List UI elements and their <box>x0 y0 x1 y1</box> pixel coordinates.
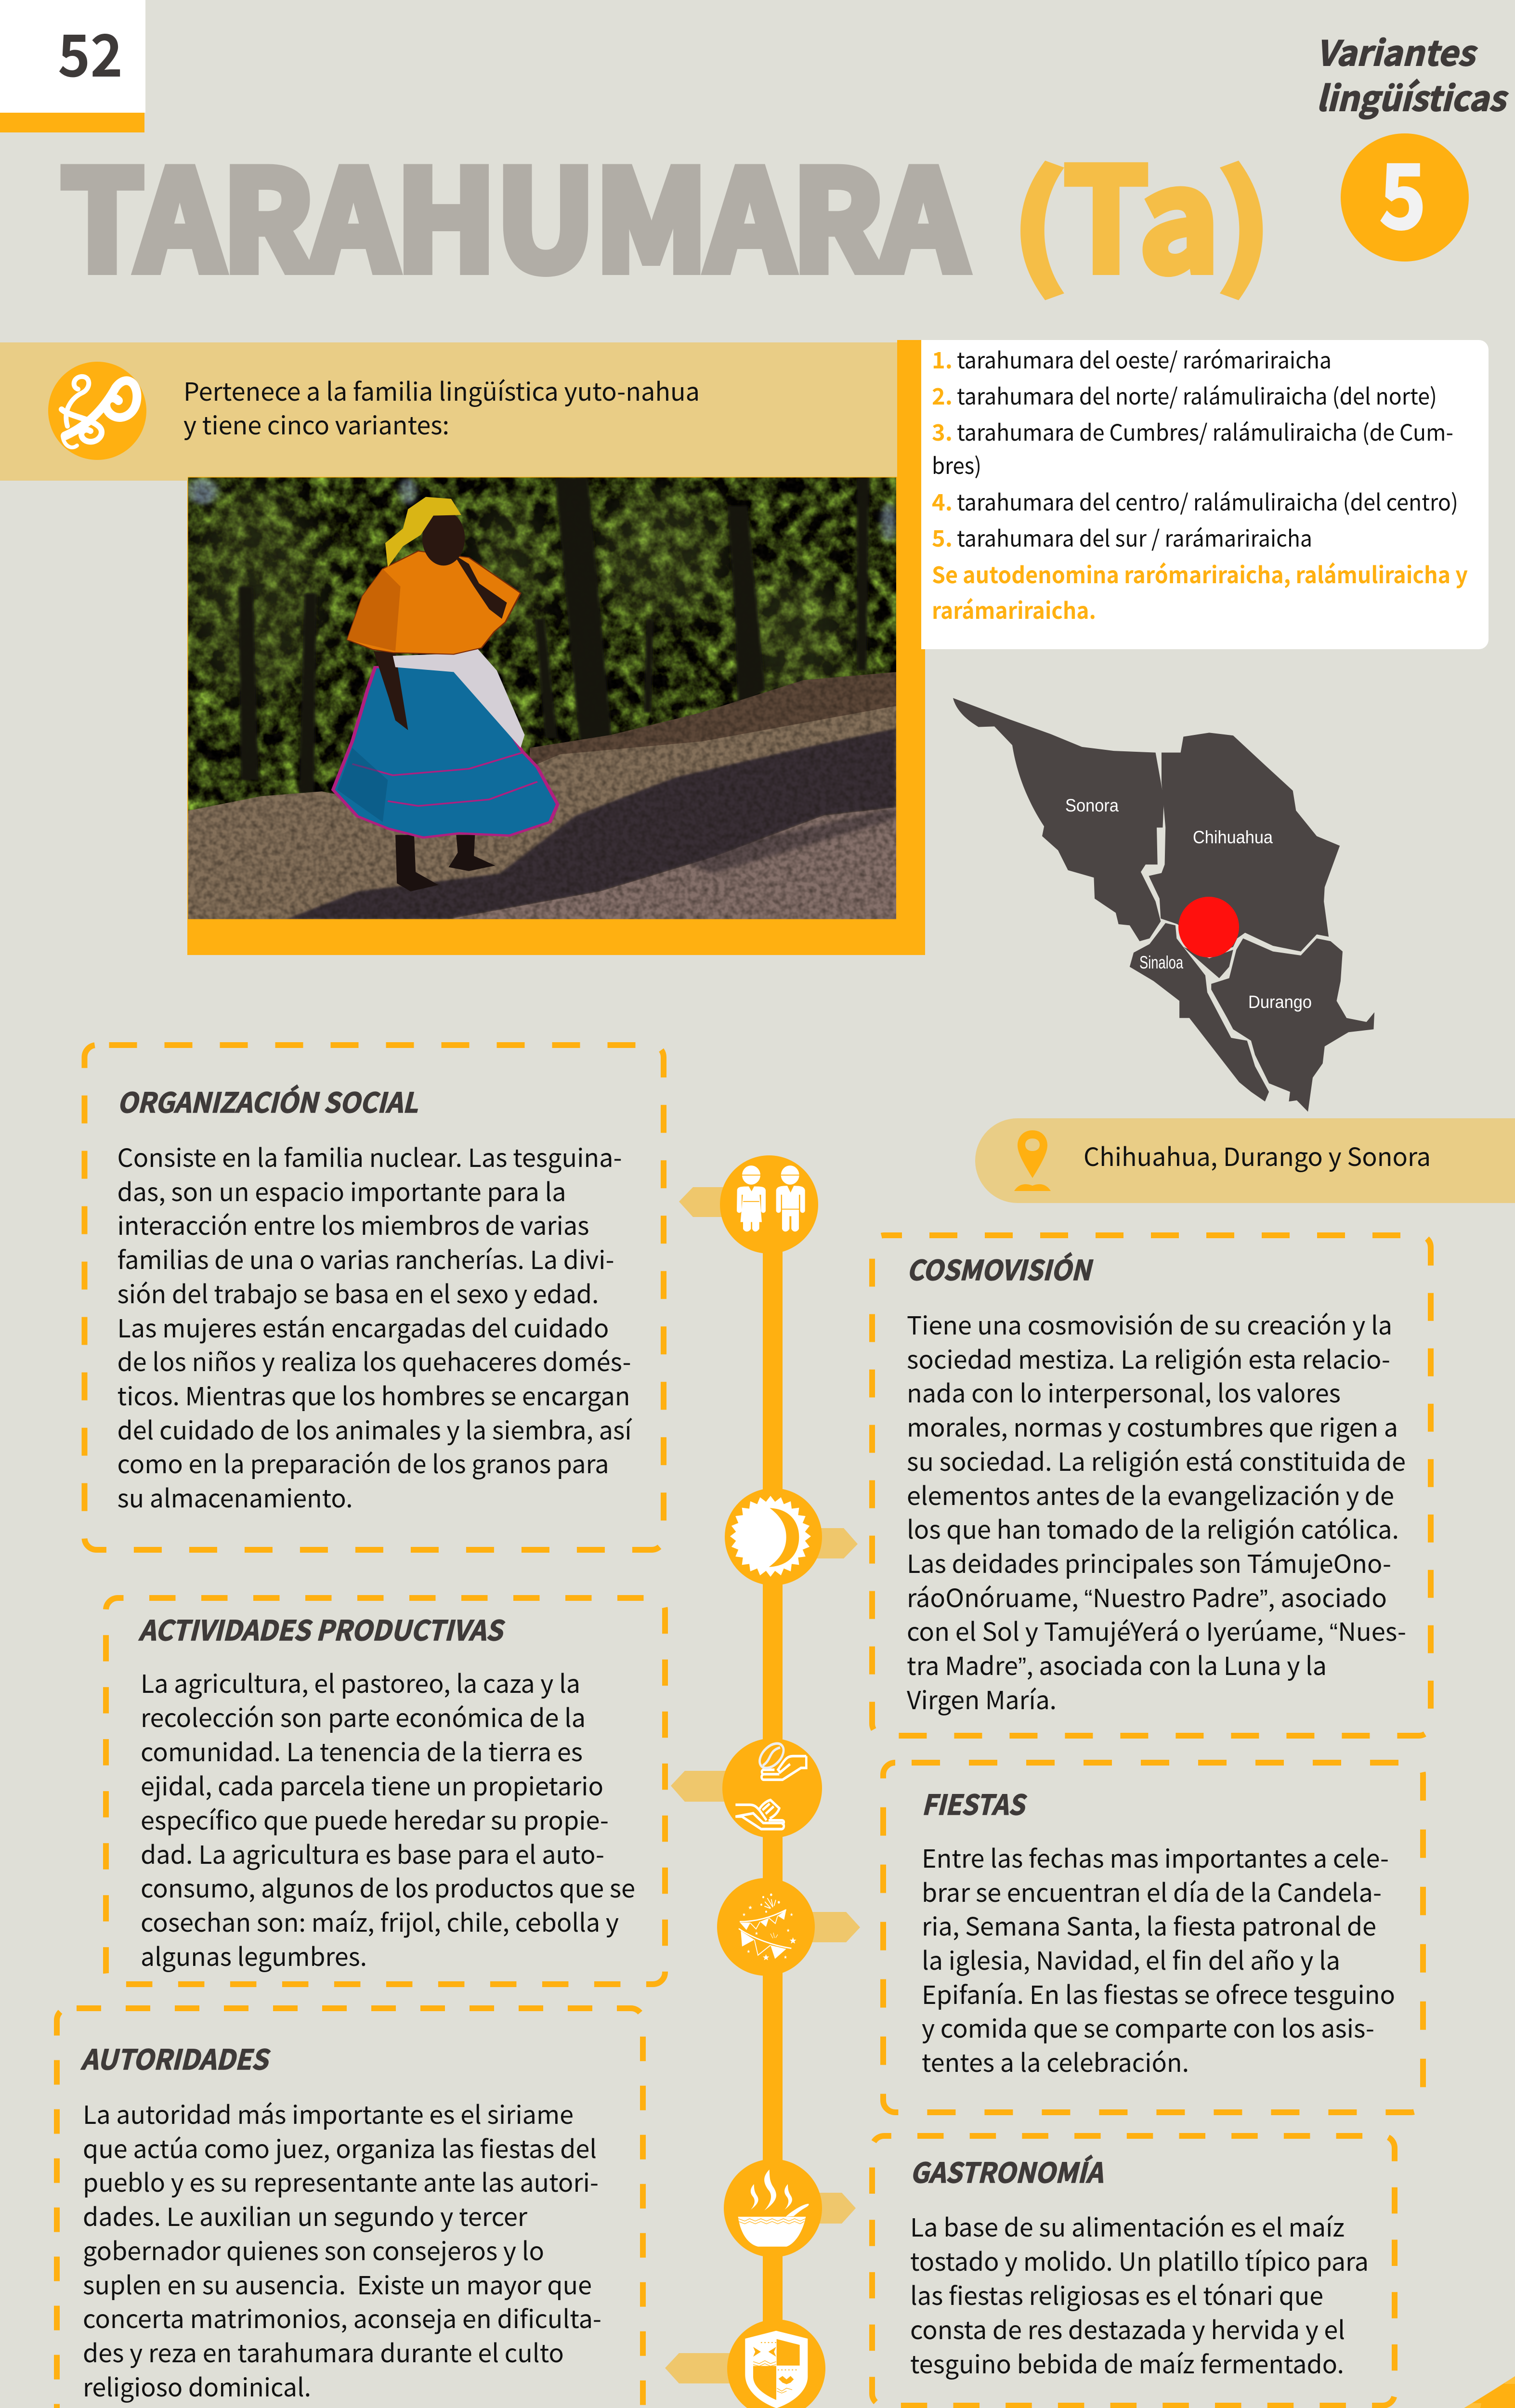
variants list panel: 1. <box>932 342 953 375</box>
state labels: Durango <box>1248 992 1312 1012</box>
text: cosmovisión: sociedad mestiza. La religión esta relacio- <box>907 1340 1390 1376</box>
title: TARAHUMARA <box>61 112 968 310</box>
text: cosmovisión: Tiene una cosmovisión de su creación y la <box>907 1306 1392 1342</box>
panel: cosmovisión <box>872 1235 1431 1736</box>
variants list panel: tarahumara del centro/ ralámuliraicha (del centro) <box>957 484 1458 517</box>
text: gastronomía: las fiestas religiosas es el tónari que <box>910 2276 1323 2312</box>
panel: organización social <box>85 1045 664 1550</box>
text: gastronomía <box>910 2208 1369 2381</box>
text: organización social: del cuidado de los animales y la siembra, así <box>118 1411 632 1447</box>
panel: fiestas <box>883 1763 1423 2112</box>
icon: hands with grain <box>722 1739 822 1838</box>
text: autoridades <box>83 2095 601 2404</box>
panel: autoridades <box>57 2008 643 2408</box>
heading: gastronomía: GASTRONOMÍA <box>910 2151 1103 2191</box>
text: organización social: familias de una o varias rancherías. La divi- <box>118 1240 614 1276</box>
text: cosmovisión: nada con lo interpersonal, los valores <box>907 1374 1341 1410</box>
map: Durango <box>1211 939 1374 1112</box>
text: actividades productivas: algunas legumbres. <box>141 1937 367 1973</box>
title: ) <box>1216 122 1273 309</box>
location marker <box>1178 897 1239 957</box>
variant count badge: 5 <box>1380 126 1426 254</box>
text: autoridades: gobernador quienes son consejeros y lo <box>83 2231 544 2267</box>
text: fiestas: Epifanía. En las fiestas se ofrece tesguino <box>922 1975 1395 2011</box>
linguistic variants heading <box>1316 26 1509 121</box>
text: organización social: de los niños y realiza los quehaceres domés- <box>118 1342 631 1378</box>
text: fiestas: brar se encuentran el día de la Candela- <box>922 1873 1382 1909</box>
variants list panel: 5. <box>932 520 953 553</box>
intro text: Pertenece a la familia lingüística yuto-nahua <box>183 372 700 408</box>
icon: man and woman in traditional clothing <box>720 1155 818 1254</box>
text: gastronomía: La base de su alimentación es el maíz <box>910 2208 1345 2244</box>
page number tab: 52 <box>58 9 123 93</box>
heading: cosmovisión: COSMOVISIÓN <box>907 1249 1094 1288</box>
linguistic variants heading: Variantes <box>1316 26 1478 76</box>
map of northwest Mexico <box>953 698 1374 1112</box>
text: actividades productivas: dad. La agricultura es base para el auto- <box>141 1835 604 1871</box>
text: organización social: Las mujeres están encargadas del cuidado <box>118 1309 609 1345</box>
text: fiestas: ria, Semana Santa, la fiesta patronal de <box>922 1907 1376 1943</box>
variants list panel: rarámariraicha. <box>932 592 1096 626</box>
heading: autoridades: AUTORIDADES <box>80 2038 271 2078</box>
intro text: y tiene cinco variantes: <box>183 406 449 442</box>
variants list panel <box>897 340 1489 649</box>
heading: organización social: ORGANIZACIÓN SOCIAL <box>118 1081 418 1121</box>
heading: fiestas: FIESTAS <box>922 1783 1027 1823</box>
timeline spine <box>763 1204 783 2369</box>
text: autoridades: religioso dominical. <box>83 2368 311 2404</box>
language family band <box>0 342 898 481</box>
text: cosmovisión: con el Sol y TamujéYerá o Iyerúame, “Nues- <box>907 1612 1406 1648</box>
text: actividades productivas: La agricultura, el pastoreo, la caza y la <box>141 1664 580 1700</box>
text: gastronomía: consta de res destazada y hervida y el <box>910 2310 1345 2346</box>
text: autoridades: suplen en su ausencia. Existe un mayor que <box>83 2265 592 2302</box>
text: cosmovisión: morales, normas y costumbres que rigen a <box>907 1408 1398 1444</box>
icon: shield <box>727 2319 825 2408</box>
text: fiestas: la iglesia, Navidad, el fin del año y la <box>922 1941 1340 1977</box>
location pill <box>975 1118 1515 1203</box>
text: fiestas: y comida que se comparte con los asis- <box>922 2009 1374 2045</box>
text: cosmovisión <box>907 1306 1406 1716</box>
heading: actividades productivas: ACTIVIDADES PRODUCTIVAS <box>138 1609 505 1649</box>
photo: Tarahumara woman in a pine forest <box>187 478 896 919</box>
text: organización social: su almacenamiento. <box>118 1479 353 1515</box>
variants list panel: 2. <box>932 378 953 411</box>
text: autoridades: pueblo y es su representante ante las autori- <box>83 2163 599 2199</box>
variants list panel: tarahumara del norte/ ralámuliraicha (del norte) <box>957 378 1437 411</box>
panel: actividades productivas <box>106 1598 665 1984</box>
text: autoridades: La autoridad más importante es el siriame <box>83 2095 574 2131</box>
text: cosmovisión: Virgen María. <box>907 1680 1057 1716</box>
text: cosmovisión: su sociedad. La religión está constituida de <box>907 1442 1406 1478</box>
linguistic variants heading: lingüísticas <box>1316 72 1509 121</box>
map: Sinaloa <box>1130 923 1269 1101</box>
intro text <box>183 372 700 442</box>
icon: swirl <box>48 362 146 460</box>
variants list panel: 3. <box>932 414 953 447</box>
variants list panel: bres) <box>932 447 981 481</box>
state labels: Chihuahua <box>1193 827 1273 847</box>
state labels: Sonora <box>1065 796 1119 815</box>
text: cosmovisión: tra Madre”, asociada con la Luna y la <box>907 1646 1327 1682</box>
page number tab <box>0 0 145 132</box>
text: actividades productivas: ejidal, cada parcela tiene un propietario <box>141 1767 603 1803</box>
text: cosmovisión: Las deidades principales son TámujeOno- <box>907 1544 1391 1580</box>
text: cosmovisión: ráoOnóruame, “Nuestro Padre”, asociado <box>907 1578 1387 1614</box>
icon: sun and moon <box>725 1488 822 1585</box>
panel: gastronomía <box>872 2136 1395 2406</box>
text: gastronomía: tesguino bebida de maíz fermentado. <box>910 2344 1344 2381</box>
text: organización social: ticos. Mientras que los hombres se encargan <box>118 1376 630 1413</box>
text: autoridades: des y reza en tarahumara durante el culto <box>83 2333 564 2369</box>
text: autoridades: concerta matrimonios, aconseja en dificulta- <box>83 2299 601 2335</box>
location pill: Chihuahua, Durango y Sonora <box>1084 1137 1431 1173</box>
text: organización social: sión del trabajo se basa en el sexo y edad. <box>118 1274 599 1310</box>
text: cosmovisión: elementos antes de la evangelización y de <box>907 1476 1394 1512</box>
text: organización social: Consiste en la familia nuclear. Las tesguina- <box>118 1138 622 1174</box>
arrows <box>665 1187 860 2383</box>
text: actividades productivas: cosechan son: maíz, frijol, chile, cebolla y <box>141 1903 619 1939</box>
text: autoridades: que actúa como juez, organiza las fiestas del <box>83 2129 597 2165</box>
variants list panel: 4. <box>932 484 953 517</box>
text: autoridades: dades. Le auxilian un segundo y tercer <box>83 2197 528 2233</box>
text: actividades productivas <box>141 1664 635 1973</box>
text: fiestas: tentes a la celebración. <box>922 2043 1189 2079</box>
variants list panel: Se autodenomina rarómariraicha, ralámuliraicha y <box>932 557 1468 590</box>
text: organización social: das, son un espacio importante para la <box>118 1172 566 1208</box>
map: Sonora <box>953 698 1164 941</box>
text: organización social: como en la preparación de los granos para <box>118 1444 609 1480</box>
icon: steaming bowl <box>724 2159 822 2257</box>
state labels <box>1065 796 1312 1012</box>
variants list panel: tarahumara del sur / rarámariraicha <box>957 520 1312 553</box>
icon: festive bunting and fireworks <box>717 1878 815 1976</box>
text: organización social <box>118 1138 632 1515</box>
map: Chihuahua <box>1149 733 1340 955</box>
title: ( <box>1010 122 1068 309</box>
state labels: Sinaloa <box>1139 953 1183 972</box>
variants list panel: tarahumara de Cumbres/ ralámuliraicha (de Cum- <box>957 414 1453 447</box>
bottom woven pattern band <box>0 2376 1515 2408</box>
text: actividades productivas: comunidad. La tenencia de la tierra es <box>141 1732 583 1768</box>
text: actividades productivas: consumo, algunos de los productos que se <box>141 1869 635 1905</box>
text: actividades productivas: recolección son parte económica de la <box>141 1698 586 1734</box>
text: fiestas <box>922 1839 1395 2079</box>
variants list panel: tarahumara del oeste/ rarómariraicha <box>957 342 1332 375</box>
text: organización social: interacción entre los miembros de varias <box>118 1206 589 1242</box>
text: gastronomía: tostado y molido. Un platillo típico para <box>910 2242 1369 2278</box>
icon: map pin <box>1014 1130 1051 1191</box>
variant count badge <box>1341 126 1469 262</box>
photo frame <box>187 340 925 955</box>
text: fiestas: Entre las fechas mas importantes a cele- <box>922 1839 1389 1875</box>
title: Ta <box>1063 105 1220 313</box>
text: actividades productivas: específico que puede heredar su propie- <box>141 1801 609 1837</box>
text: cosmovisión: los que han tomado de la religión católica. <box>907 1510 1399 1546</box>
